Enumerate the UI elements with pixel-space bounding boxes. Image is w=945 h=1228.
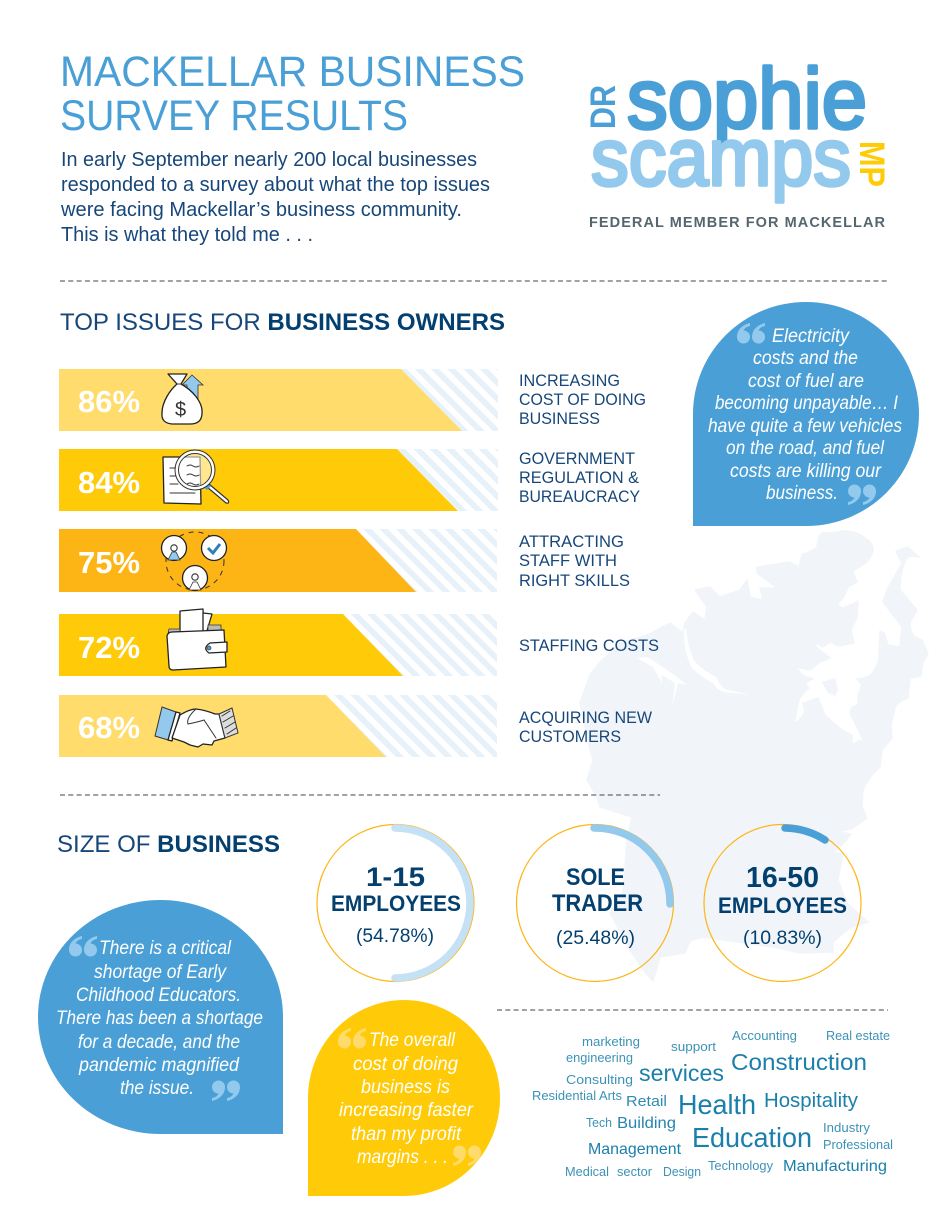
- word cloud: business sectors: marketing: [582, 1034, 640, 1049]
- bar: 84% government regulation: [59, 449, 498, 511]
- quote bubble: electricity costs: costs are killing our: [730, 461, 882, 482]
- word cloud: business sectors: Professional: [823, 1137, 893, 1152]
- opening quote mark: [69, 936, 97, 956]
- label: government regulation: GOVERNMENT: [519, 449, 635, 468]
- word cloud: business sectors: engineering: [566, 1050, 633, 1065]
- title: [60, 48, 525, 140]
- intro text: were facing Mackellar’s business community.: [60, 199, 462, 221]
- word cloud: business sectors: Building: [617, 1115, 676, 1132]
- word cloud: business sectors: Residential Arts: [532, 1088, 622, 1103]
- closing quote mark: [453, 1146, 481, 1166]
- word cloud: business sectors: Medical: [565, 1164, 609, 1179]
- word cloud: business sectors: Tech: [586, 1115, 612, 1130]
- word cloud: business sectors: Construction: [731, 1049, 867, 1075]
- icon: money bag: [162, 374, 203, 424]
- logo: scamps: [591, 112, 851, 203]
- icon: wallet: [167, 609, 227, 670]
- quote bubble: overall cost of doing business: margins . . .: [357, 1147, 448, 1168]
- icon: money bag: $: [175, 399, 186, 421]
- logo: [584, 52, 891, 231]
- quote bubble: overall cost of doing business: business is: [361, 1077, 450, 1098]
- icon: document and magnifier: [163, 450, 229, 504]
- logo: FEDERAL MEMBER FOR MACKELLAR: [589, 215, 886, 231]
- quote bubble: electricity costs: business.: [766, 483, 838, 504]
- bar: 72% staffing costs: 72%: [78, 630, 140, 665]
- quote bubble: overall cost of doing business: than my profit: [351, 1124, 462, 1145]
- bar: 75% attracting staff: [59, 529, 497, 592]
- label: acquiring new customers: [519, 708, 652, 746]
- closing quote mark: [848, 484, 876, 505]
- bar: 86% increasing cost of doing business: [59, 369, 498, 431]
- label: increasing cost of doing business: BUSINESS: [519, 409, 600, 428]
- word cloud: business sectors: Design: [663, 1164, 701, 1179]
- quote bubble: early childhood educators: for a decade, and the: [78, 1032, 240, 1053]
- title: MACKELLAR BUSINESS: [60, 48, 525, 96]
- word cloud: business sectors: support: [671, 1039, 716, 1054]
- quote bubble: early childhood educators: shortage of Early: [94, 962, 227, 983]
- circle: sole trader: (25.48%): [556, 928, 635, 949]
- circle: 16-50 employees: (10.83%): [743, 928, 822, 949]
- label: acquiring new customers: ACQUIRING NEW: [519, 708, 652, 727]
- quote bubble: overall cost of doing business: increasing faster: [339, 1100, 474, 1121]
- label: increasing cost of doing business: COST OF DOING: [519, 390, 646, 409]
- word cloud: business sectors: Real estate: [826, 1028, 890, 1043]
- bar: 75% attracting staff: 75%: [78, 545, 140, 580]
- word cloud: business sectors: services: [639, 1060, 724, 1086]
- quote bubble: overall cost of doing business: [308, 1000, 500, 1196]
- word cloud: business sectors: Retail: [626, 1093, 667, 1110]
- quote bubble: overall cost of doing business: The overall: [369, 1030, 456, 1051]
- intro text: In early September nearly 200 local businesses: [61, 149, 477, 171]
- circle: sole trader: SOLE: [566, 864, 625, 891]
- word cloud: business sectors: sector: [617, 1164, 653, 1179]
- heading: size of business: SIZE OF BUSINESS: [57, 831, 280, 858]
- bar: 86% increasing cost of doing business: 86%: [78, 384, 140, 419]
- label: attracting staff: ATTRACTING: [519, 532, 624, 551]
- label: increasing cost of doing business: INCREASING: [519, 371, 620, 390]
- label: attracting staff: RIGHT SKILLS: [519, 571, 630, 590]
- quote bubble: electricity costs: Electricity: [772, 326, 850, 347]
- logo: DR: [584, 85, 623, 129]
- word cloud: business sectors: Management: [588, 1141, 682, 1158]
- quote bubble: early childhood educators: the issue.: [120, 1078, 194, 1099]
- label: government regulation: REGULATION &: [519, 468, 640, 487]
- quote bubble: early childhood educators: There is a critical: [99, 938, 232, 959]
- bar: 68% acquiring new customers: [59, 695, 497, 757]
- circle: 16-50 employees: [704, 824, 861, 982]
- label: attracting staff: STAFF WITH: [519, 551, 617, 570]
- icon: handshake: [155, 707, 238, 747]
- circle: sole trader: [516, 824, 674, 982]
- opening quote mark: [338, 1028, 366, 1048]
- circle: 1-15 employees: [317, 824, 474, 982]
- label: government regulation: [519, 449, 640, 506]
- circle: 1-15 employees: (54.78%): [356, 926, 434, 947]
- bar: 68% acquiring new customers: 68%: [78, 710, 140, 745]
- quote bubble: electricity costs: on the road, and fuel: [726, 438, 885, 459]
- circle: 1-15 employees: 1-15: [366, 862, 425, 892]
- circle: 1-15 employees: EMPLOYEES: [331, 891, 461, 916]
- quote bubble: early childhood educators: pandemic magnified: [78, 1055, 240, 1076]
- quote bubble: electricity costs: costs and the: [753, 348, 858, 369]
- word cloud: business sectors: Accounting: [732, 1028, 797, 1043]
- heading: top issues: TOP ISSUES FOR BUSINESS OWNERS: [60, 309, 505, 336]
- word cloud: business sectors: Industry: [823, 1120, 871, 1135]
- intro text: This is what they told me . . .: [61, 224, 313, 246]
- quote bubble: early childhood educators: There has been a shortage: [56, 1008, 263, 1029]
- label: government regulation: BUREAUCRACY: [519, 487, 640, 506]
- word cloud: business sectors: Health: [678, 1089, 756, 1120]
- logo: sophie: [627, 52, 867, 147]
- bar: 84% government regulation: 84%: [78, 465, 140, 500]
- word cloud: business sectors: Technology: [708, 1158, 773, 1173]
- closing quote mark: [212, 1080, 240, 1101]
- label: acquiring new customers: CUSTOMERS: [519, 727, 621, 746]
- word cloud: business sectors: Manufacturing: [783, 1158, 887, 1175]
- quote bubble: early childhood educators: Childhood Educators.: [76, 985, 241, 1006]
- label: staffing costs: STAFFING COSTS: [519, 636, 659, 655]
- label: attracting staff: [519, 532, 630, 590]
- label: increasing cost of doing business: [519, 371, 646, 428]
- word cloud: business sectors: Education: [692, 1122, 812, 1153]
- logo: MP: [852, 141, 891, 187]
- circle: 16-50 employees: 16-50: [746, 862, 819, 894]
- intro text: responded to a survey about what the top issues: [61, 174, 490, 196]
- word cloud: business sectors: Consulting: [566, 1072, 633, 1087]
- circle: sole trader: TRADER: [552, 890, 643, 917]
- opening quote mark: [737, 323, 765, 344]
- icon: staff circles: [162, 532, 226, 590]
- quote bubble: overall cost of doing business: cost of doing: [353, 1054, 458, 1075]
- background map of Mackellar: [580, 531, 928, 981]
- quote bubble: early childhood educators: [38, 900, 283, 1134]
- circle: 16-50 employees: EMPLOYEES: [718, 893, 847, 918]
- bar: 72% staffing costs: [59, 609, 497, 676]
- word cloud: business sectors: Hospitality: [764, 1090, 858, 1112]
- quote bubble: electricity costs: cost of fuel are: [748, 371, 864, 392]
- intro text: [60, 149, 490, 246]
- quote bubble: electricity costs: [693, 302, 919, 526]
- quote bubble: electricity costs: have quite a few vehicles: [708, 416, 902, 437]
- title: SURVEY RESULTS: [60, 92, 408, 140]
- quote bubble: electricity costs: becoming unpayable… I: [715, 393, 899, 414]
- word cloud: business sectors: [532, 1028, 893, 1179]
